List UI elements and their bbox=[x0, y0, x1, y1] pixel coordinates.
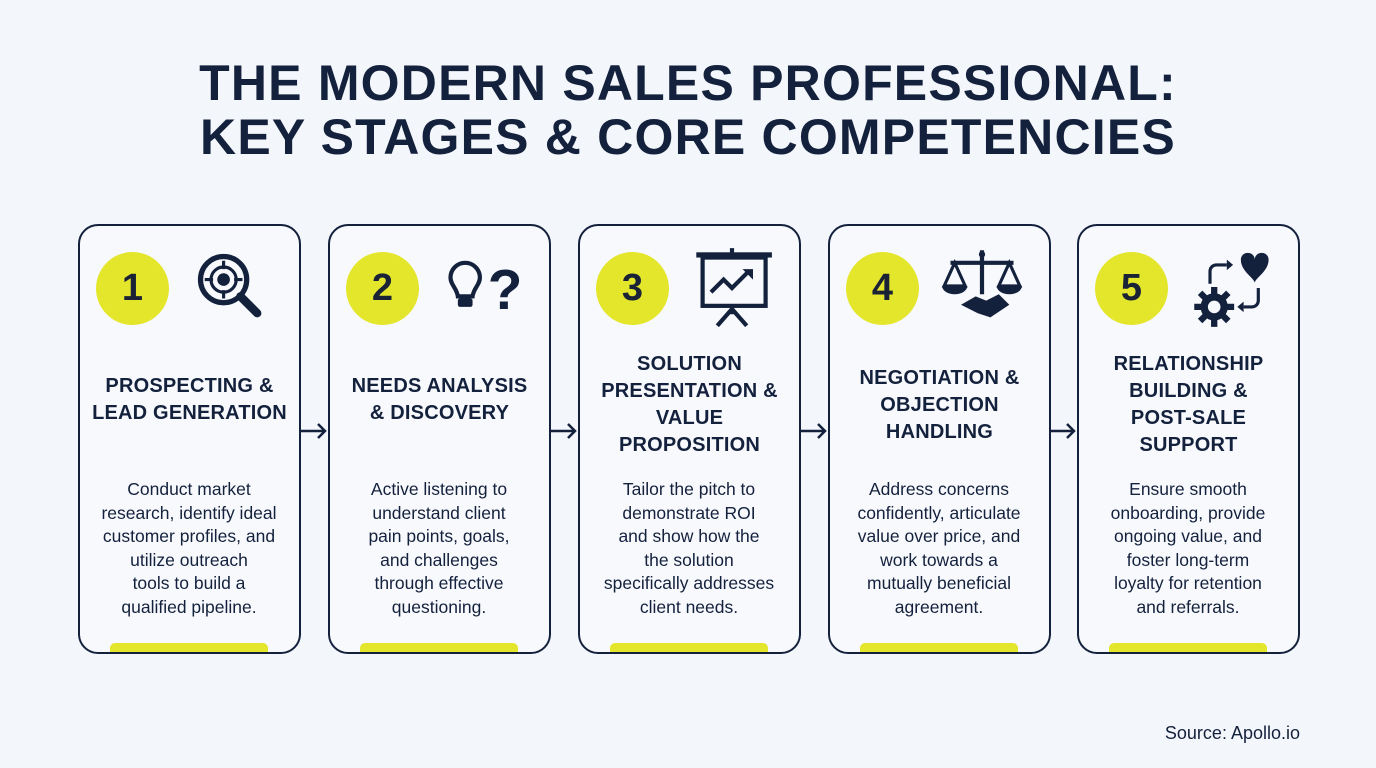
number badge 5 bbox=[1095, 252, 1168, 325]
number badge 2 bbox=[346, 252, 419, 325]
description: and challenges bbox=[380, 550, 498, 570]
heading bbox=[1114, 353, 1263, 456]
description: work towards a bbox=[880, 550, 998, 570]
description: pain points, goals, bbox=[368, 526, 510, 546]
number badge 4: 4 bbox=[872, 267, 893, 309]
description bbox=[604, 479, 774, 617]
heading: NEGOTIATION & bbox=[859, 367, 1020, 389]
heading: SUPPORT bbox=[1139, 434, 1238, 456]
title: KEY STAGES & CORE COMPETENCIES bbox=[200, 109, 1176, 165]
description: Tailor the pitch to bbox=[623, 479, 755, 499]
icon: bulb question: ? bbox=[488, 259, 522, 322]
description: and referrals. bbox=[1136, 597, 1240, 617]
description: research, identify ideal bbox=[101, 503, 277, 523]
heading bbox=[601, 353, 778, 456]
title bbox=[199, 55, 1177, 165]
number badge 1 bbox=[96, 252, 169, 325]
number badge 5: 5 bbox=[1121, 267, 1142, 309]
description bbox=[101, 479, 277, 617]
icon: scales handshake bbox=[942, 250, 1022, 318]
heading: BUILDING & bbox=[1129, 380, 1248, 402]
description: and show how the bbox=[618, 526, 760, 546]
description: onboarding, provide bbox=[1111, 503, 1265, 523]
heading: PRESENTATION & bbox=[601, 380, 778, 402]
description: Address concerns bbox=[869, 479, 1009, 499]
panel: stage 5 bbox=[1077, 224, 1300, 654]
number badge 4 bbox=[846, 252, 919, 325]
description: specifically addresses bbox=[604, 573, 774, 593]
icon: presentation board bbox=[696, 248, 772, 328]
description: agreement. bbox=[895, 597, 983, 617]
description: confidently, articulate bbox=[857, 503, 1021, 523]
description: customer profiles, and bbox=[103, 526, 275, 546]
heading: HANDLING bbox=[886, 421, 993, 443]
number badge 2: 2 bbox=[372, 267, 393, 309]
description: understand client bbox=[372, 503, 506, 523]
heading: LEAD GENERATION bbox=[92, 402, 287, 424]
heading: OBJECTION bbox=[880, 394, 999, 416]
description: demonstrate ROI bbox=[622, 503, 756, 523]
heading bbox=[859, 367, 1020, 443]
description: Active listening to bbox=[371, 479, 507, 499]
description bbox=[1111, 479, 1265, 617]
description: loyalty for retention bbox=[1114, 573, 1262, 593]
icon: target magnifier bbox=[198, 254, 262, 318]
description: through effective bbox=[374, 573, 504, 593]
number badge 3 bbox=[596, 252, 669, 325]
heading: VALUE bbox=[656, 407, 723, 429]
number badge 3: 3 bbox=[622, 267, 643, 309]
heading: RELATIONSHIP bbox=[1114, 353, 1263, 375]
description bbox=[368, 479, 510, 617]
description: the solution bbox=[644, 550, 734, 570]
description: ongoing value, and bbox=[1114, 526, 1262, 546]
description: foster long-term bbox=[1127, 550, 1249, 570]
description: questioning. bbox=[392, 597, 486, 617]
panel: stage 2 bbox=[328, 224, 551, 654]
panel: stage 3 bbox=[578, 224, 801, 654]
heading: PROSPECTING & bbox=[105, 375, 274, 397]
source: Source: Apollo.io bbox=[1165, 723, 1300, 743]
heading bbox=[352, 375, 527, 424]
description: value over price, and bbox=[858, 526, 1020, 546]
description: Conduct market bbox=[127, 479, 251, 499]
title: THE MODERN SALES PROFESSIONAL: bbox=[199, 55, 1177, 111]
description bbox=[857, 479, 1021, 617]
panel: stage 4 bbox=[828, 224, 1051, 654]
description: client needs. bbox=[640, 597, 738, 617]
panel: stage 1 bbox=[78, 224, 301, 654]
heading: PROPOSITION bbox=[619, 434, 760, 456]
icon: bulb question bbox=[448, 259, 522, 322]
heading: & DISCOVERY bbox=[370, 402, 509, 424]
heading: NEEDS ANALYSIS bbox=[352, 375, 527, 397]
heading: SOLUTION bbox=[637, 353, 742, 375]
description: mutually beneficial bbox=[867, 573, 1011, 593]
heading bbox=[92, 375, 287, 424]
icon: gear heart cycle bbox=[1194, 252, 1269, 327]
heading: POST-SALE bbox=[1131, 407, 1246, 429]
description: utilize outreach bbox=[130, 550, 248, 570]
number badge 1: 1 bbox=[122, 267, 143, 309]
description: tools to build a bbox=[133, 573, 245, 593]
description: Ensure smooth bbox=[1129, 479, 1247, 499]
description: qualified pipeline. bbox=[121, 597, 257, 617]
